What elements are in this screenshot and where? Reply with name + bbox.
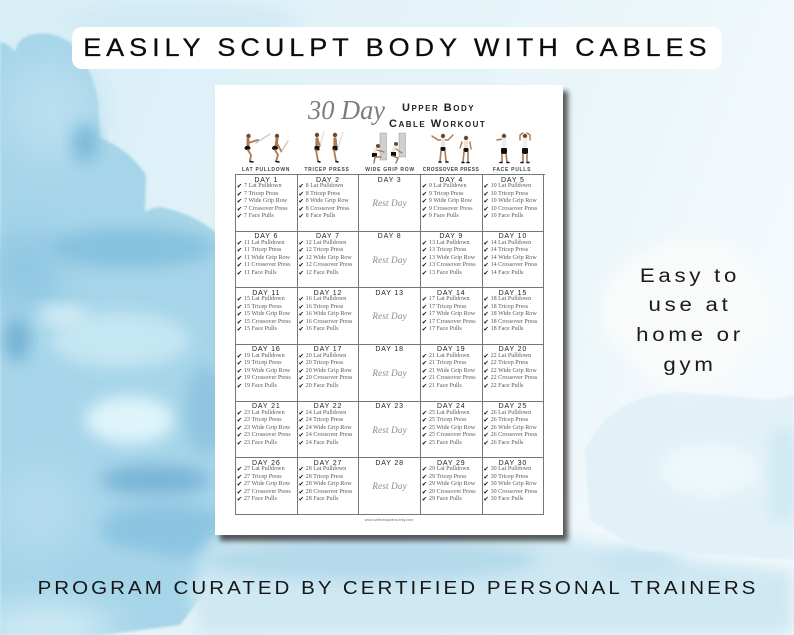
day 4: DAY 4 <box>439 176 463 184</box>
day 1: 7 Tricep Press <box>244 190 279 196</box>
day 6: 11 Wide Grip Row <box>244 255 290 261</box>
website footer: www.wellnessplans.etsy.com <box>365 518 413 522</box>
day 11: 15 Tricep Press <box>244 304 282 310</box>
day 14: 17 Face Pulls <box>429 326 462 332</box>
day 11: 15 Face Pulls <box>244 326 277 332</box>
day 9: 13 Wide Grip Row <box>429 255 475 261</box>
day 4: 9 Wide Grip Row <box>429 198 472 204</box>
day 27: 28 Face Pulls <box>306 496 338 502</box>
day 17: 20 Tricep Press <box>306 360 343 366</box>
day 14: DAY 14 <box>437 290 466 297</box>
day 30: 30 Lat Pulldown <box>491 466 531 472</box>
day 20: 22 Face Pulls <box>491 383 523 389</box>
day 30: 30 Face Pulls <box>491 496 523 502</box>
day 1: 7 Lat Pulldown <box>244 183 282 189</box>
icon: tricep press figures <box>314 132 343 162</box>
day 5 <box>483 175 544 232</box>
day 16: 19 Crossover Press <box>244 375 291 381</box>
day 9: 13 Face Pulls <box>429 270 462 276</box>
day 7: 12 Wide Grip Row <box>306 255 352 261</box>
day 25 <box>483 402 544 458</box>
day 25: DAY 25 <box>499 403 527 410</box>
day 15 <box>483 288 544 345</box>
side note: Easy to <box>640 266 740 286</box>
label: crossover press: CROSSOVER PRESS <box>423 167 479 173</box>
day 1: 7 Crossover Press <box>244 206 288 212</box>
day 20: 22 Wide Grip Row <box>491 368 537 374</box>
day 2: 8 Face Pulls <box>306 213 335 219</box>
calendar grid <box>235 174 545 515</box>
day 19: 21 Tricep Press <box>429 360 467 366</box>
heading banner <box>72 27 722 69</box>
day 25: 26 Tricep Press <box>491 417 528 423</box>
day 2: 8 Tricep Press <box>306 190 340 196</box>
day 26: 27 Crossover Press <box>244 489 291 495</box>
day 8 <box>359 232 421 288</box>
day 29: 29 Face Pulls <box>429 496 462 502</box>
day 12 <box>298 288 359 345</box>
day 2: 8 Crossover Press <box>306 206 349 212</box>
panel: workout calendar sheet <box>215 85 563 534</box>
day 15: 18 Tricep Press <box>491 304 528 310</box>
day 20 <box>483 345 544 402</box>
day 22: 24 Lat Pulldown <box>306 410 346 416</box>
day 4: 9 Crossover Press <box>429 206 473 212</box>
day 13 <box>359 288 421 345</box>
day 20: 22 Lat Pulldown <box>491 353 531 359</box>
day 30: 30 Tricep Press <box>491 474 528 480</box>
side note <box>636 266 744 376</box>
day 26: 27 Wide Grip Row <box>244 481 290 487</box>
day 7: 12 Lat Pulldown <box>306 240 346 246</box>
day 10: 14 Lat Pulldown <box>491 240 531 246</box>
day 19: DAY 19 <box>437 346 466 353</box>
day 9: DAY 9 <box>439 233 463 240</box>
side note: use at <box>648 295 732 316</box>
bottom tagline: PROGRAM CURATED BY CERTIFIED PERSONAL TRAINERS <box>38 577 758 598</box>
day 11 <box>236 288 298 345</box>
day 30: 30 Crossover Press <box>491 489 537 495</box>
day 3: Rest Day <box>372 198 407 208</box>
day 17: 20 Face Pulls <box>306 383 338 389</box>
label: tricep press: TRICEP PRESS <box>304 167 350 173</box>
day 6: 11 Face Pulls <box>244 270 277 276</box>
day 10: DAY 10 <box>499 233 527 240</box>
day 17 <box>298 345 359 402</box>
day 2: DAY 2 <box>316 176 340 184</box>
day 7: 12 Face Pulls <box>306 270 338 276</box>
day 22: 24 Tricep Press <box>306 417 343 423</box>
day 30 <box>483 458 544 515</box>
day 5: 10 Crossover Press <box>491 206 537 212</box>
day 26 <box>236 458 298 515</box>
icon: wide grip row figures with machines <box>372 133 406 163</box>
day 26: 27 Tricep Press <box>244 474 282 480</box>
day 18: Rest Day <box>372 368 407 378</box>
day 13: Rest Day <box>372 311 407 321</box>
day 17: 20 Crossover Press <box>306 375 352 381</box>
side note: home or <box>636 325 744 346</box>
day 29: 29 Wide Grip Row <box>429 481 475 487</box>
day 14 <box>421 288 483 345</box>
day 11: 15 Wide Grip Row <box>244 311 290 317</box>
day 11: 15 Crossover Press <box>244 319 291 325</box>
day 16: DAY 16 <box>252 346 281 353</box>
day 4: 9 Tricep Press <box>429 190 463 196</box>
day 21: 23 Wide Grip Row <box>244 425 290 431</box>
day 19: 21 Wide Grip Row <box>429 368 475 374</box>
day 28: Rest Day <box>372 481 407 491</box>
day 16 <box>236 345 298 402</box>
day 17: 20 Wide Grip Row <box>306 368 352 374</box>
title: Upper Body: Upper Body <box>402 102 475 114</box>
day 7: 12 Crossover Press <box>306 262 352 268</box>
day 28: DAY 28 <box>375 460 404 467</box>
day 8: Rest Day <box>372 255 407 265</box>
label: wide grip row: WIDE GRIP ROW <box>365 167 415 173</box>
day 14: 17 Lat Pulldown <box>429 296 470 302</box>
title: Cable Workout: Cable Workout <box>389 118 486 130</box>
label: face pulls: FACE PULLS <box>493 167 531 173</box>
day 19: 21 Lat Pulldown <box>429 353 470 359</box>
day 17: 20 Lat Pulldown <box>306 353 346 359</box>
day 8: DAY 8 <box>378 233 402 240</box>
day 21: 23 Lat Pulldown <box>244 410 285 416</box>
day 24: 25 Crossover Press <box>429 432 476 438</box>
day 6: 11 Lat Pulldown <box>244 240 284 246</box>
day 27: 28 Wide Grip Row <box>306 481 352 487</box>
day 22: 24 Crossover Press <box>306 432 352 438</box>
day 24: 25 Tricep Press <box>429 417 467 423</box>
day 6 <box>236 232 298 288</box>
day 18: DAY 18 <box>375 346 404 353</box>
day 18 <box>359 345 421 402</box>
day 25: 26 Wide Grip Row <box>491 425 537 431</box>
day 2: 8 Wide Grip Row <box>306 198 349 204</box>
day 9: 13 Crossover Press <box>429 262 476 268</box>
day 27: DAY 27 <box>314 460 342 467</box>
day 12: DAY 12 <box>314 290 342 297</box>
day 25: 26 Crossover Press <box>491 432 537 438</box>
day 12: 16 Lat Pulldown <box>306 296 346 302</box>
day 22 <box>298 402 359 458</box>
exercise illustrations <box>244 132 531 164</box>
day 23 <box>359 402 421 458</box>
day 5: DAY 5 <box>501 176 525 184</box>
day 5: 10 Lat Pulldown <box>491 183 531 189</box>
day 4: 9 Face Pulls <box>429 213 459 219</box>
day 20: DAY 20 <box>499 346 527 353</box>
day 1: 7 Wide Grip Row <box>244 198 287 204</box>
day 12: 16 Crossover Press <box>306 319 352 325</box>
day 10: 14 Face Pulls <box>491 270 523 276</box>
day 24: 25 Lat Pulldown <box>429 410 470 416</box>
day 24: 25 Face Pulls <box>429 440 462 446</box>
day 25: 26 Face Pulls <box>491 440 523 446</box>
day 9: 13 Lat Pulldown <box>429 240 470 246</box>
day 6: DAY 6 <box>254 233 278 240</box>
day 14: 17 Wide Grip Row <box>429 311 475 317</box>
day 10: 14 Wide Grip Row <box>491 255 537 261</box>
day 25: 26 Lat Pulldown <box>491 410 531 416</box>
day 13: DAY 13 <box>375 290 404 297</box>
day 22: 24 Wide Grip Row <box>306 425 352 431</box>
day 27: 28 Lat Pulldown <box>306 466 346 472</box>
day 12: 16 Tricep Press <box>306 304 343 310</box>
day 20: 22 Crossover Press <box>491 375 537 381</box>
day 21: DAY 21 <box>252 403 281 410</box>
day 12: 16 Wide Grip Row <box>306 311 352 317</box>
day 24: DAY 24 <box>437 403 466 410</box>
day 22: 24 Face Pulls <box>306 440 338 446</box>
icon: face pulls figures <box>497 133 530 162</box>
day 12: 16 Face Pulls <box>306 326 338 332</box>
day 29: DAY 29 <box>437 460 466 467</box>
day 3 <box>359 175 421 232</box>
day 28 <box>359 458 421 515</box>
day 30: DAY 30 <box>499 460 527 467</box>
day 29: 29 Tricep Press <box>429 474 467 480</box>
day 14: 17 Tricep Press <box>429 304 467 310</box>
day 20: 22 Tricep Press <box>491 360 528 366</box>
day 24: 25 Wide Grip Row <box>429 425 475 431</box>
day 15: 18 Wide Grip Row <box>491 311 537 317</box>
day 24 <box>421 402 483 458</box>
day 7: DAY 7 <box>316 233 340 240</box>
day 29: 29 Lat Pulldown <box>429 466 470 472</box>
label: lat pulldown: LAT PULLDOWN <box>242 167 290 173</box>
day 3: DAY 3 <box>378 176 402 184</box>
day 29 <box>421 458 483 515</box>
day 5: 10 Wide Grip Row <box>491 198 537 204</box>
day 15: 18 Face Pulls <box>491 326 523 332</box>
day 2: 8 Lat Pulldown <box>306 183 343 189</box>
day 4 <box>421 175 483 232</box>
day 6: 11 Tricep Press <box>244 247 281 253</box>
day 21: 23 Crossover Press <box>244 432 291 438</box>
title script: 30 Day: 30 Day <box>307 95 385 125</box>
day 16: 19 Face Pulls <box>244 383 277 389</box>
day 11: 15 Lat Pulldown <box>244 296 285 302</box>
day 15: 18 Crossover Press <box>491 319 537 325</box>
day 19: 21 Face Pulls <box>429 383 462 389</box>
day 7 <box>298 232 359 288</box>
day 10: 14 Crossover Press <box>491 262 537 268</box>
day 6: 11 Crossover Press <box>244 262 290 268</box>
day 19 <box>421 345 483 402</box>
day 1: 7 Face Pulls <box>244 213 274 219</box>
day 2 <box>298 175 359 232</box>
day 9: 13 Tricep Press <box>429 247 467 253</box>
day 14: 17 Crossover Press <box>429 319 476 325</box>
day 21: 23 Face Pulls <box>244 440 277 446</box>
day 1: DAY 1 <box>254 176 278 184</box>
day 21: 23 Tricep Press <box>244 417 282 423</box>
day 16: 19 Tricep Press <box>244 360 282 366</box>
day 29: 29 Crossover Press <box>429 489 476 495</box>
day 10 <box>483 232 544 288</box>
day 26: 27 Lat Pulldown <box>244 466 285 472</box>
day 5: 10 Tricep Press <box>491 190 528 196</box>
day 7: 12 Tricep Press <box>306 247 343 253</box>
day 22: DAY 22 <box>314 403 342 410</box>
day 15: DAY 15 <box>499 290 527 297</box>
day 11: DAY 11 <box>252 290 280 297</box>
day 17: DAY 17 <box>314 346 342 353</box>
day 23: Rest Day <box>372 425 407 435</box>
day 26: 27 Face Pulls <box>244 496 277 502</box>
day 30: 30 Wide Grip Row <box>491 481 537 487</box>
day 16: 19 Wide Grip Row <box>244 368 290 374</box>
day 10: 14 Tricep Press <box>491 247 528 253</box>
day 27: 28 Tricep Press <box>306 474 343 480</box>
day 21 <box>236 402 298 458</box>
day 16: 19 Lat Pulldown <box>244 353 285 359</box>
icon: crossover press figures <box>432 134 471 162</box>
icon: lat pulldown figures <box>244 134 288 162</box>
day 23: DAY 23 <box>375 403 404 410</box>
day 1 <box>236 175 298 232</box>
day 19: 21 Crossover Press <box>429 375 476 381</box>
day 27 <box>298 458 359 515</box>
side note: gym <box>663 355 717 376</box>
day 27: 28 Crossover Press <box>306 489 352 495</box>
heading banner: EASILY SCULPT BODY WITH CABLES <box>83 34 711 62</box>
day 9 <box>421 232 483 288</box>
day 26: DAY 26 <box>252 460 281 467</box>
day 15: 18 Lat Pulldown <box>491 296 531 302</box>
day 5: 10 Face Pulls <box>491 213 523 219</box>
day 4: 9 Lat Pulldown <box>429 183 466 189</box>
